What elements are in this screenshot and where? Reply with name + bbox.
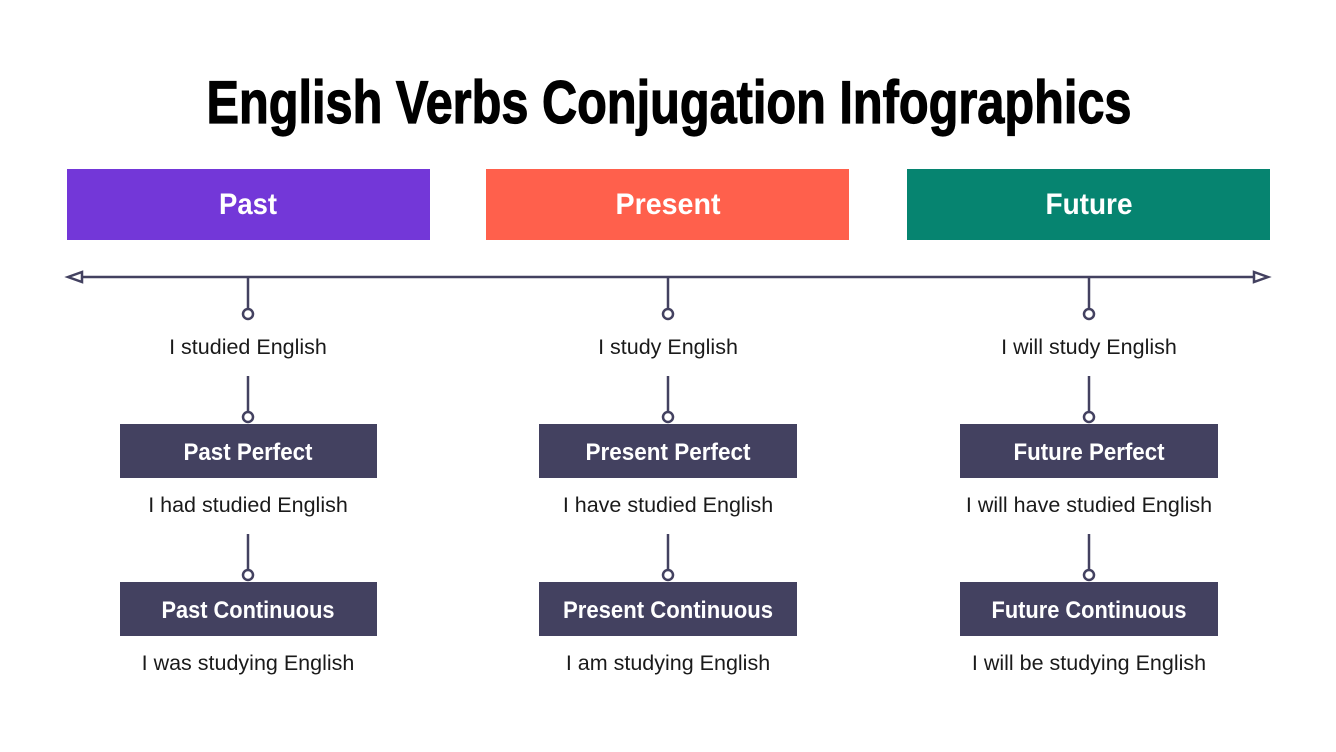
perfect boxes: Present Perfect xyxy=(586,439,750,466)
connectors xyxy=(243,277,1094,580)
continuous texts: I will be studying English xyxy=(972,651,1206,675)
title: English Verbs Conjugation Infographics xyxy=(206,69,1132,136)
header: past: Past xyxy=(219,188,277,221)
continuous boxes xyxy=(120,582,1218,636)
continuous boxes: Past Continuous xyxy=(162,597,334,624)
perfect texts: I will have studied English xyxy=(966,493,1212,517)
simple tense texts xyxy=(169,335,1177,359)
header: future: Future xyxy=(1046,188,1132,221)
header: present: Present xyxy=(616,188,721,221)
perfect boxes: Past Perfect xyxy=(184,439,312,466)
header: future xyxy=(907,169,1270,240)
perfect boxes: Future Perfect xyxy=(1014,439,1165,466)
continuous boxes: Future Continuous xyxy=(992,597,1186,624)
perfect texts: I had studied English xyxy=(148,493,348,517)
timeline arrow xyxy=(68,272,1268,282)
perfect texts: I have studied English xyxy=(563,493,773,517)
continuous texts xyxy=(142,651,1206,675)
simple tense texts: I studied English xyxy=(169,335,327,359)
header: present xyxy=(486,169,849,240)
simple tense texts: I will study English xyxy=(1001,335,1177,359)
continuous texts: I am studying English xyxy=(566,651,770,675)
continuous boxes: Present Continuous xyxy=(563,597,773,624)
perfect boxes xyxy=(120,424,1218,478)
continuous texts: I was studying English xyxy=(142,651,354,675)
perfect texts xyxy=(148,493,1212,517)
simple tense texts: I study English xyxy=(598,335,738,359)
header: past xyxy=(67,169,430,240)
